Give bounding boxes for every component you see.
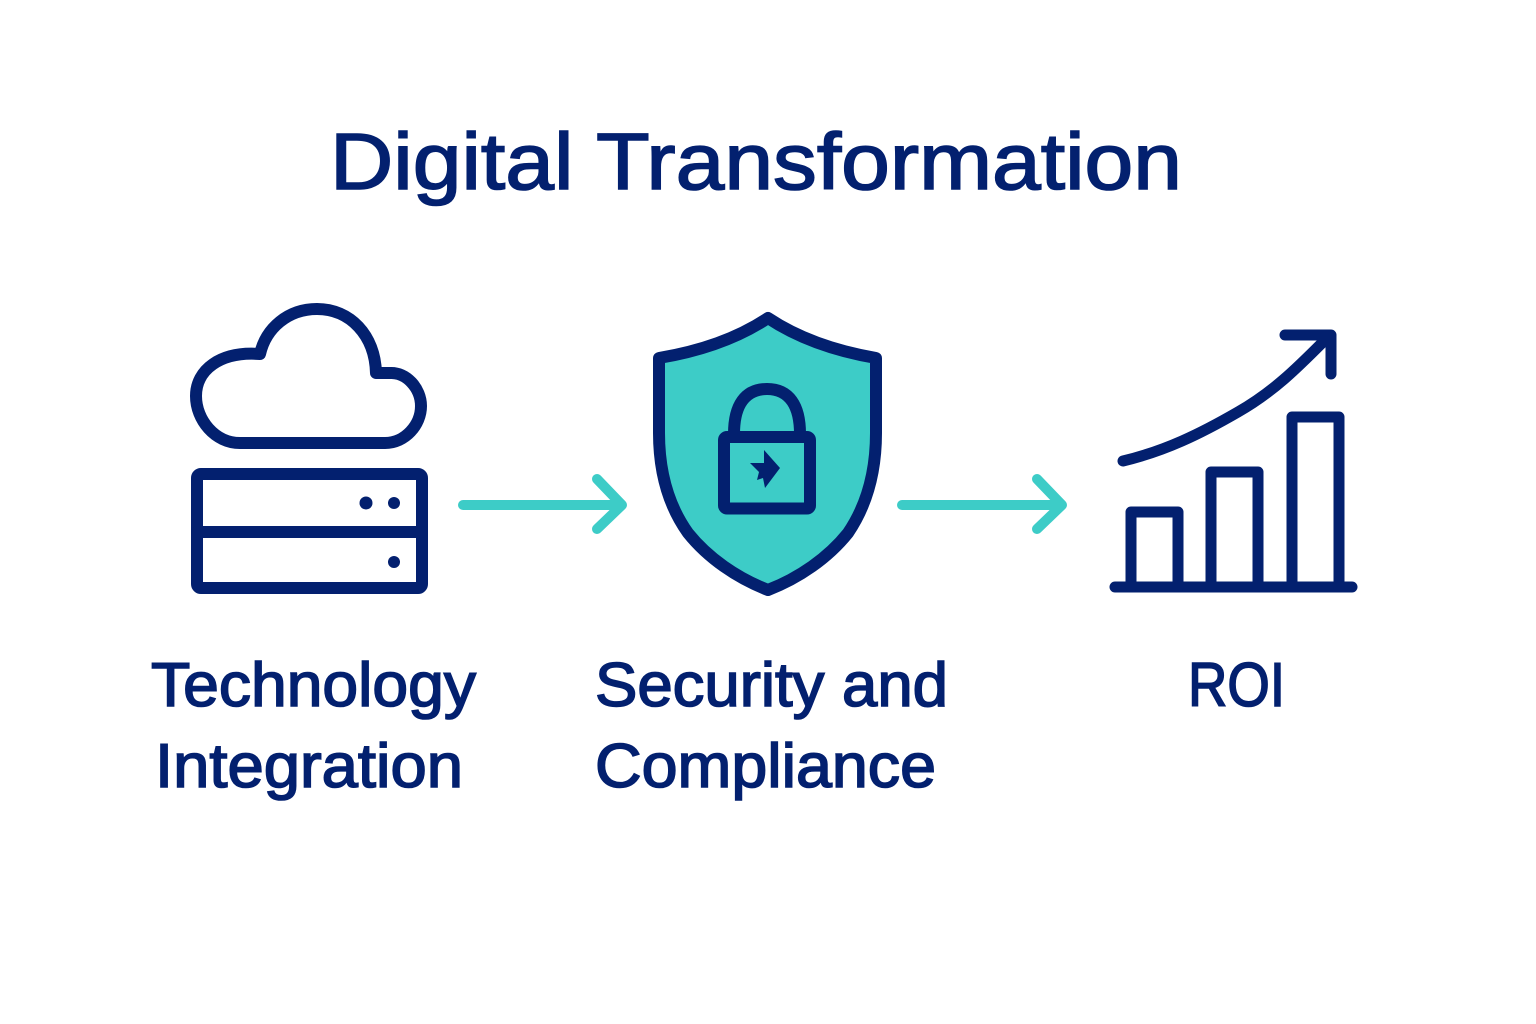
label: Technology Integration: Technology — [151, 651, 476, 720]
arrow: security to ROI — [902, 479, 1062, 529]
icon: shield with lock — [659, 318, 876, 590]
icon: rising bar chart — [1115, 335, 1352, 587]
lock — [724, 389, 810, 508]
server — [197, 474, 422, 588]
shield — [659, 318, 876, 590]
label: Security and Compliance: Compliance — [595, 732, 936, 801]
label: Security and Compliance — [595, 651, 948, 801]
label: Technology Integration: Integration — [155, 732, 463, 801]
icon: cloud and server — [196, 309, 422, 588]
label: Technology Integration — [151, 651, 476, 801]
cloud — [196, 309, 421, 443]
label: Security and Compliance: Security and — [595, 651, 948, 720]
title: Digital Transformation — [330, 117, 1182, 206]
label: ROI: ROI — [1188, 651, 1285, 720]
arrow: technology to security — [463, 479, 622, 529]
growth arrow — [1123, 335, 1331, 461]
